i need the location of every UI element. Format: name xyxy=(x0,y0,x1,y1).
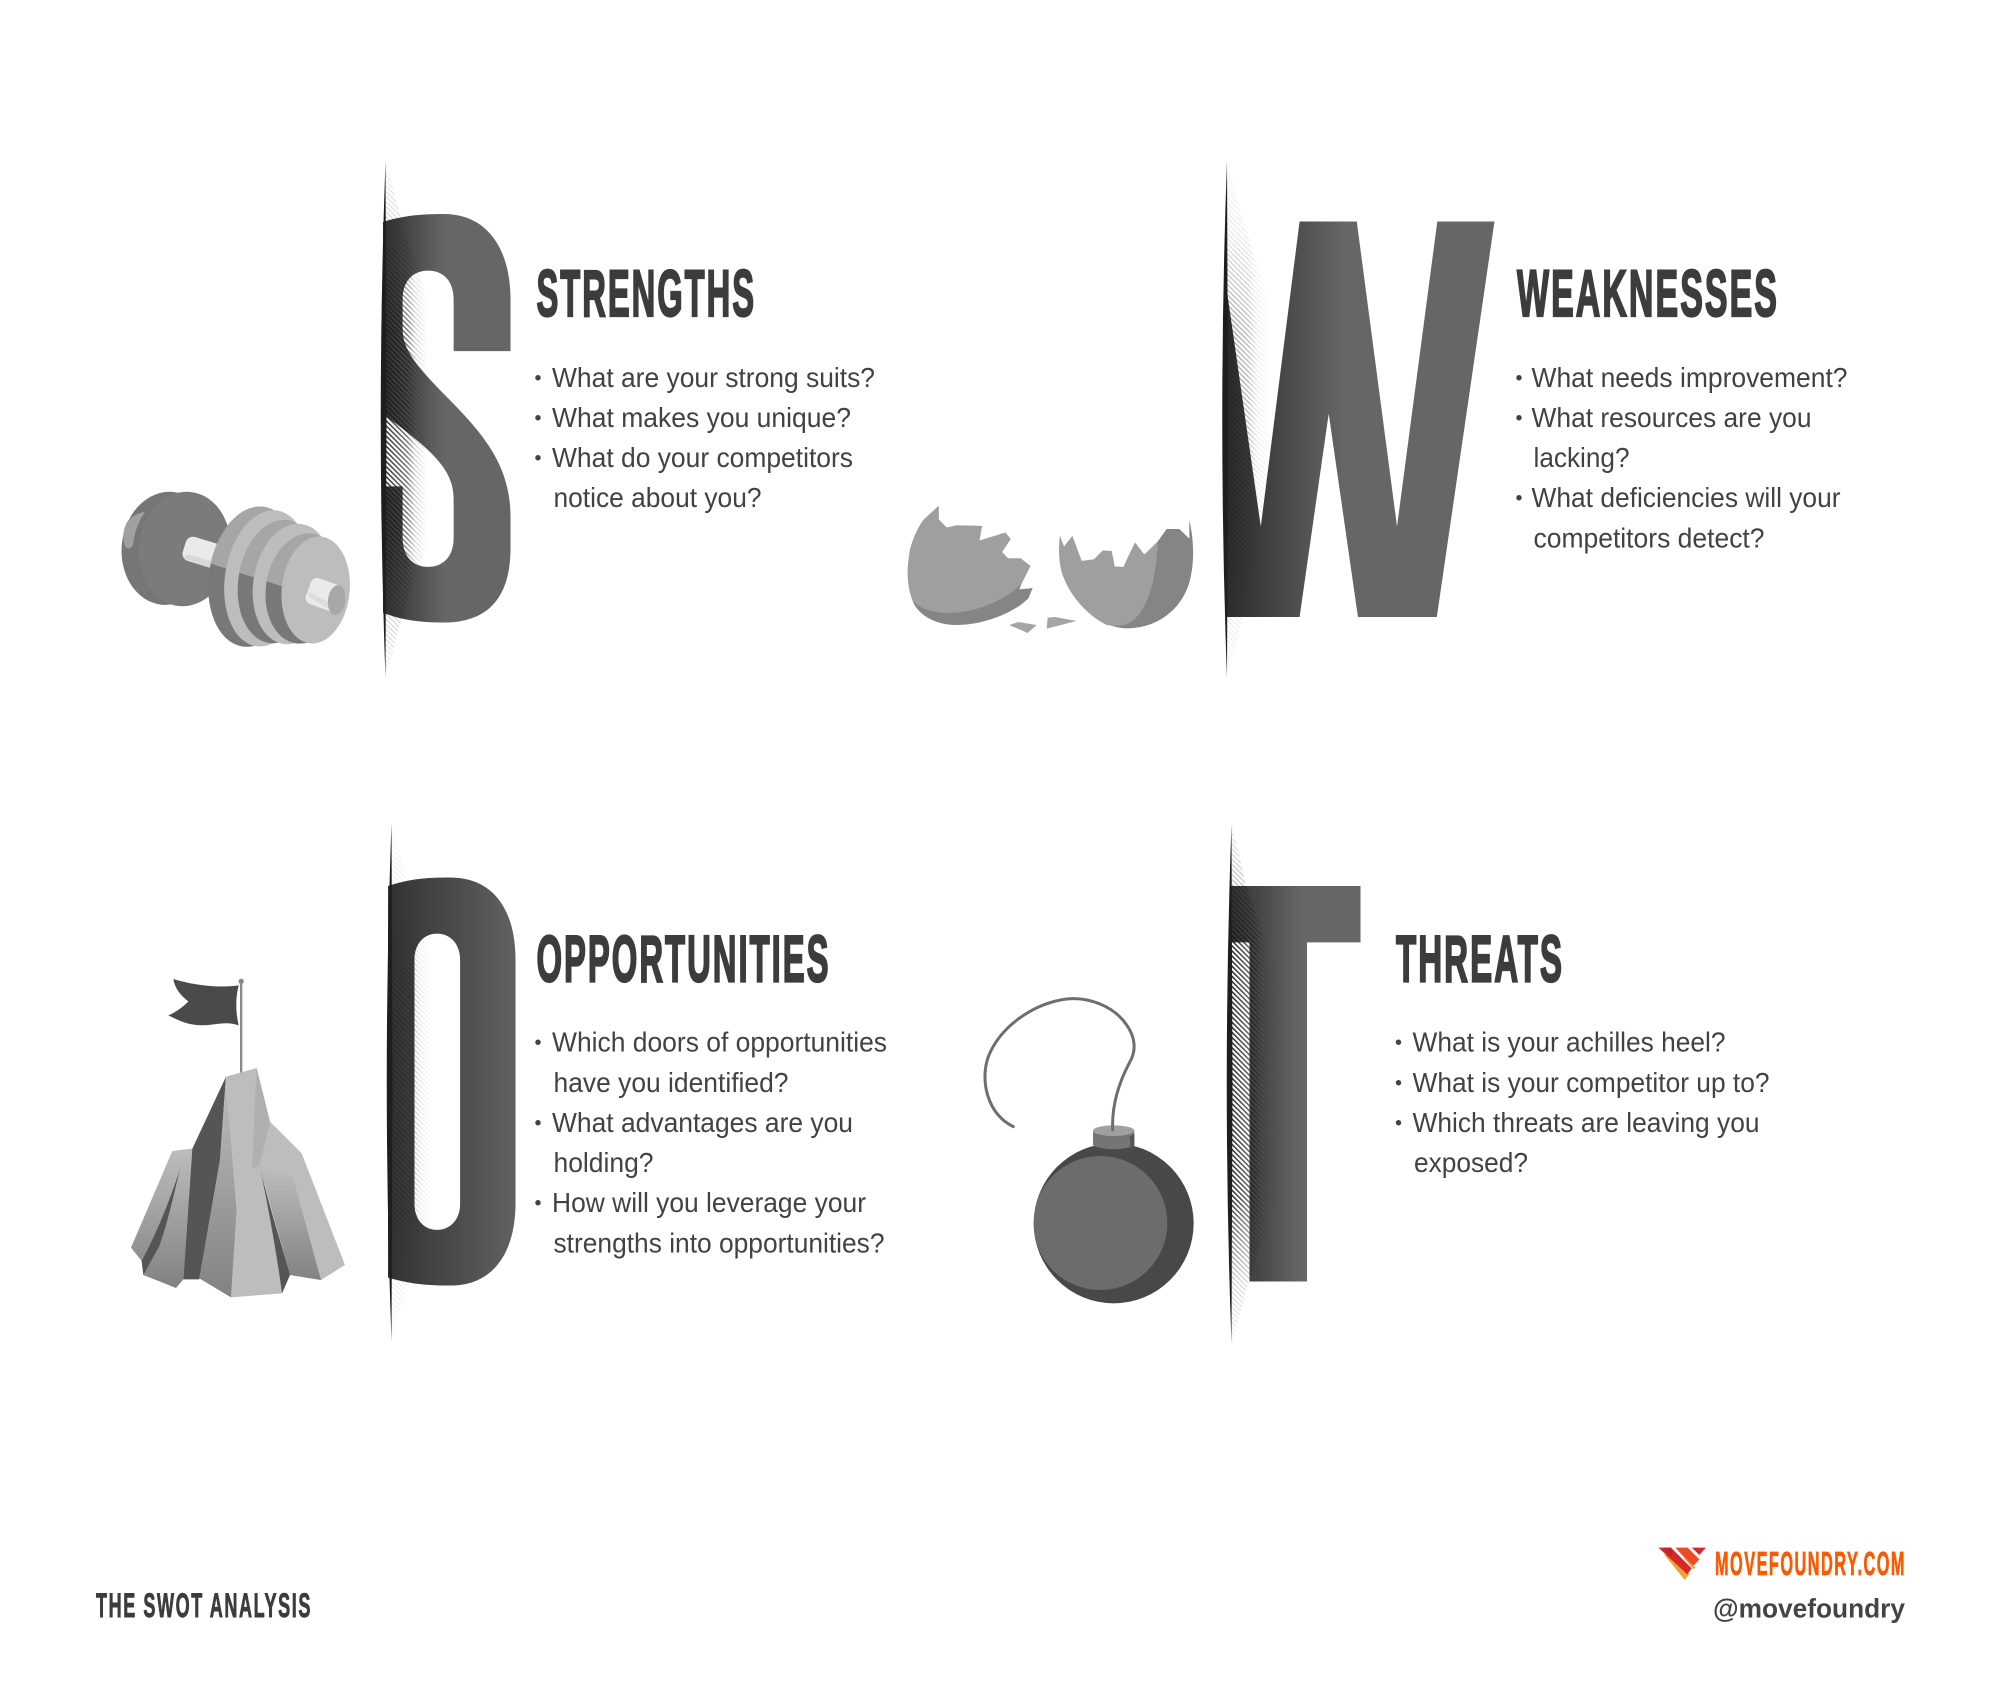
text block: threats questions: • xyxy=(1395,1112,1402,1134)
text block: strengths questions: • xyxy=(534,408,542,430)
text block: threats questions: What is your competitor up to? xyxy=(1412,1067,1770,1098)
text block: opportunities questions: holding? xyxy=(554,1147,654,1178)
hatch shadow W xyxy=(1227,178,1264,664)
panel: threats xyxy=(985,824,1770,1344)
text block: opportunities questions: have you identified? xyxy=(554,1067,788,1098)
icon: mountain with flag xyxy=(131,979,345,1297)
text block: strengths questions: • xyxy=(534,448,542,470)
panel: opportunities: OPPORTUNITIES xyxy=(536,922,830,996)
text block: weaknesses questions: What needs improvement? xyxy=(1532,362,1848,393)
text block: weaknesses questions: What deficiencies will your xyxy=(1532,482,1840,513)
text block: strengths questions: What are your strong suits? xyxy=(552,362,875,393)
text block: opportunities questions xyxy=(534,1026,887,1258)
letter S xyxy=(383,214,511,623)
spine S xyxy=(381,161,386,678)
text block: strengths questions xyxy=(534,362,875,513)
text block: opportunities questions: How will you leverage your xyxy=(552,1187,866,1218)
footer title: THE SWOT ANALYSIS xyxy=(96,1587,312,1625)
spine W xyxy=(1222,161,1228,678)
text block: opportunities questions: Which doors of opportunities xyxy=(552,1026,887,1058)
text block: opportunities questions: • xyxy=(534,1193,542,1215)
text block: strengths questions: What do your competitors xyxy=(552,442,853,473)
spine T xyxy=(1227,824,1232,1344)
text block: weaknesses questions: competitors detect? xyxy=(1534,523,1764,554)
text block: strengths questions: notice about you? xyxy=(554,482,762,513)
text block: strengths questions: • xyxy=(534,368,542,390)
letter W xyxy=(1226,222,1494,617)
text block: threats questions xyxy=(1395,1026,1770,1178)
spine O xyxy=(387,823,392,1341)
social handle: @movefoundry xyxy=(1713,1594,1905,1624)
text block: opportunities questions: strengths into opportunities? xyxy=(554,1228,884,1258)
text block: strengths questions: What makes you unique? xyxy=(552,402,851,433)
icon: dumbbell xyxy=(122,492,350,647)
text block: threats questions: Which threats are leaving you xyxy=(1412,1107,1760,1138)
text block: threats questions: What is your achilles heel? xyxy=(1412,1026,1726,1058)
text block: opportunities questions: • xyxy=(534,1112,542,1134)
text block: weaknesses questions: • xyxy=(1516,488,1523,510)
text block: weaknesses questions: What resources are you xyxy=(1532,402,1812,433)
icon: broken egg xyxy=(908,506,1193,633)
text block: threats questions: • xyxy=(1395,1073,1402,1095)
text block: weaknesses questions: • xyxy=(1516,368,1523,390)
icon: bomb xyxy=(985,999,1194,1303)
panel: strengths xyxy=(116,161,875,678)
panel: strengths: STRENGTHS xyxy=(536,256,756,330)
panel: weaknesses xyxy=(908,161,1848,678)
text block: opportunities questions: • xyxy=(534,1032,542,1054)
text block: opportunities questions: What advantages are you xyxy=(552,1107,853,1138)
hatch shadow S xyxy=(386,162,428,678)
text block: weaknesses questions: • xyxy=(1516,408,1523,430)
text block: threats questions: exposed? xyxy=(1414,1147,1528,1178)
hatch shadow T xyxy=(1232,828,1264,1340)
icon: movefoundry logo xyxy=(1658,1548,1706,1580)
text block: threats questions: • xyxy=(1395,1032,1402,1054)
text block: weaknesses questions: lacking? xyxy=(1534,442,1630,473)
text block: weaknesses questions xyxy=(1516,362,1848,554)
letter T xyxy=(1230,886,1360,1282)
hatch shadow O xyxy=(392,844,428,1321)
panel: opportunities xyxy=(131,823,887,1341)
heading: threats: THREATS xyxy=(1396,922,1564,996)
letter O xyxy=(388,878,516,1286)
